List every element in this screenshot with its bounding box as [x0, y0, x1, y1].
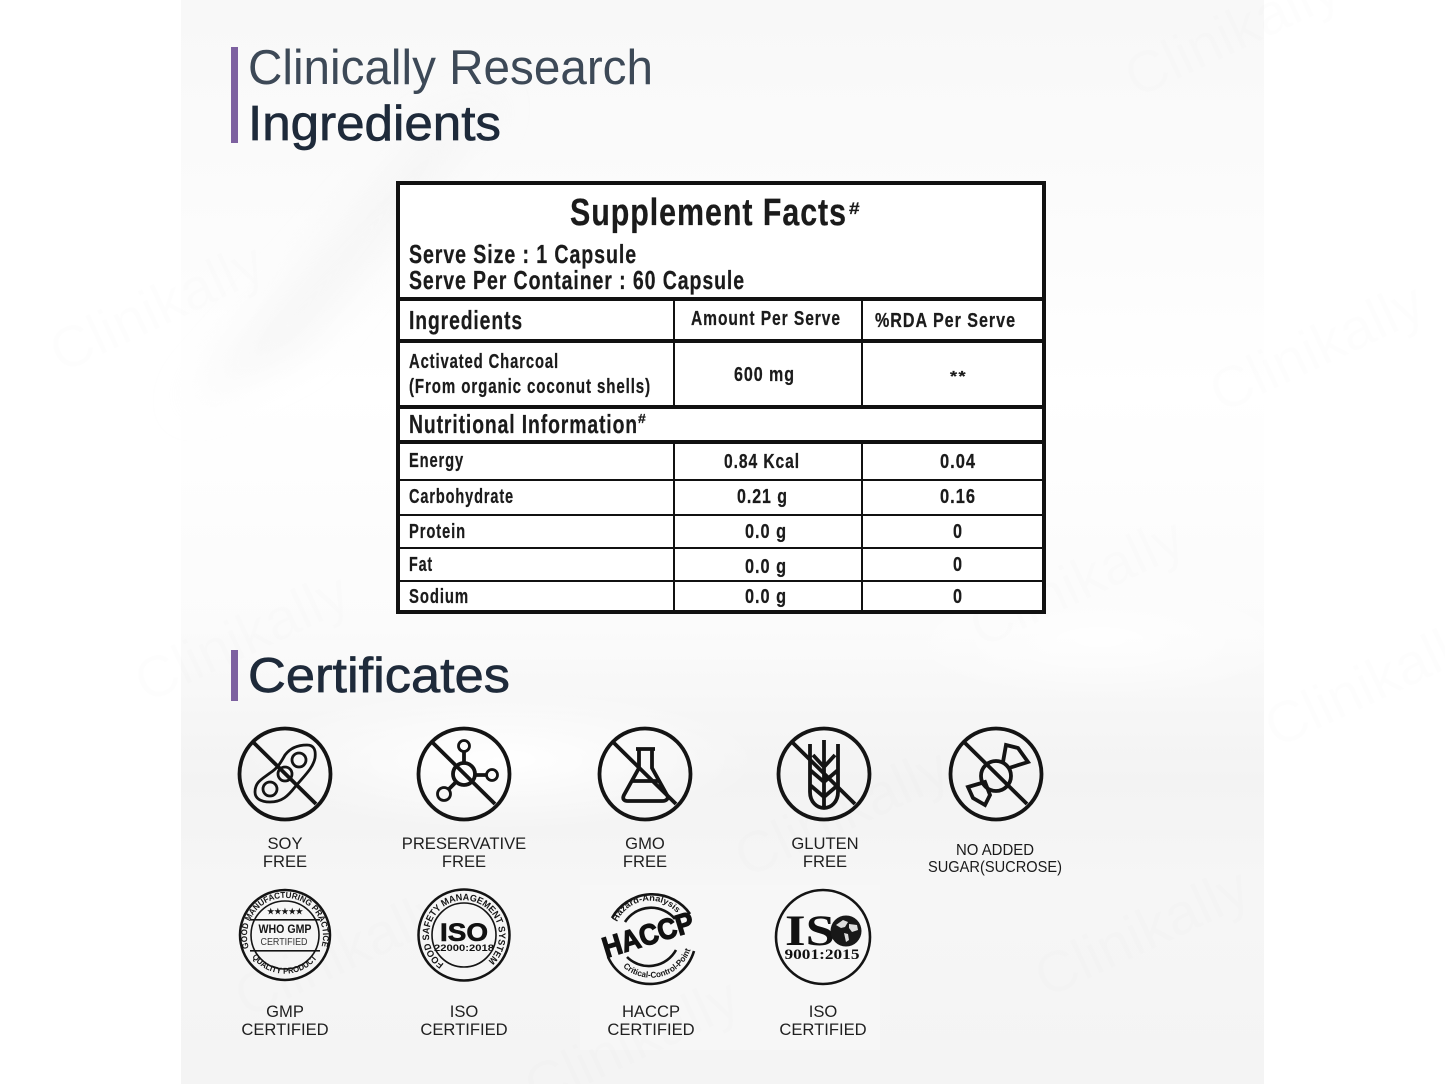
label: preservative free: FREE	[442, 852, 486, 871]
badge: iso 9001: IS	[785, 908, 835, 955]
label: no added sugar	[928, 842, 1062, 876]
badge: haccp: HACCP	[599, 907, 698, 965]
watermarks: Clinikally	[1199, 270, 1434, 425]
label: iso certified: CERTIFIED	[779, 1020, 867, 1039]
supplement facts table: Supplement Facts	[570, 192, 847, 234]
label: iso certified: CERTIFIED	[420, 1020, 508, 1039]
watermarks: Clinikally	[224, 875, 459, 1030]
badge: who gmp: WHO GMP	[258, 922, 312, 936]
badge: iso 9001: 9001:2015	[784, 947, 860, 963]
watermarks: Clinikally	[124, 560, 359, 715]
icon: gluten free	[778, 728, 870, 820]
supplement facts table: %RDA Per Serve	[875, 310, 1016, 332]
label: preservative free: PRESERVATIVE	[402, 834, 526, 853]
supplement facts table: Protein	[409, 521, 466, 543]
label: gmp certified: GMP	[266, 1002, 304, 1021]
supplement facts table: Nutritional Information	[409, 409, 638, 439]
label: iso certified	[420, 1002, 508, 1039]
badge: iso 9001	[776, 890, 870, 984]
badge: haccp	[599, 893, 698, 986]
supplement facts table: Ingredients	[409, 305, 523, 335]
badge: haccp: Hazard-Analysis	[612, 896, 680, 922]
supplement facts table: 0.0 g	[745, 556, 787, 578]
label: gmo free: GMO	[625, 834, 665, 853]
supplement facts table: 0.84 Kcal	[724, 451, 800, 473]
label: haccp certified: HACCP	[622, 1002, 680, 1021]
label: iso certified	[779, 1002, 867, 1039]
watermarks: Clinikally	[724, 735, 959, 890]
supplement facts table	[398, 183, 1044, 612]
label: gluten free	[791, 834, 859, 871]
heading: clinically research ingredients	[231, 41, 653, 151]
heading: clinically research ingredients: Ingredients	[248, 97, 501, 151]
label: haccp certified	[607, 1002, 695, 1039]
label: iso certified: ISO	[809, 1002, 837, 1021]
label: soy free: SOY	[267, 834, 303, 853]
label: iso certified: ISO	[450, 1002, 478, 1021]
supplement facts table: (From organic coconut shells)	[409, 376, 651, 398]
watermarks: Clinikally	[1024, 855, 1259, 1010]
supplement facts table: Serve Per Container : 60 Capsule	[409, 265, 745, 295]
supplement facts table: **	[950, 368, 967, 385]
supplement facts table: Fat	[409, 554, 433, 576]
badge: iso 22000: FOOD SAFETY MANAGEMENT SYSTEM	[422, 894, 506, 969]
label: gmp certified: CERTIFIED	[241, 1020, 329, 1039]
icon: soy free	[240, 728, 330, 820]
supplement facts table: 0	[953, 554, 963, 576]
label: gmo free: FREE	[623, 852, 667, 871]
label: no added sugar: NO ADDED	[956, 842, 1034, 859]
supplement facts table: 0	[953, 586, 963, 608]
label: preservative free	[402, 834, 526, 871]
label: no added sugar: SUGAR(SUCROSE)	[928, 859, 1062, 876]
supplement facts table: 0	[953, 521, 963, 543]
supplement facts table: Carbohydrate	[409, 486, 514, 508]
badge: iso 22000: ISO	[440, 919, 488, 947]
supplement facts table: Activated Charcoal	[409, 351, 559, 373]
icon: gmo free	[600, 728, 690, 820]
watermarks: Clinikally	[39, 230, 274, 385]
supplement facts table: 0.16	[940, 486, 976, 508]
supplement facts table: Energy	[409, 450, 464, 472]
badge: who gmp	[238, 888, 332, 982]
supplement facts table: Serve Size : 1 Capsule	[409, 239, 637, 269]
label: gluten free: GLUTEN	[791, 834, 859, 853]
label: haccp certified: CERTIFIED	[607, 1020, 695, 1039]
badge: who gmp: GOOD MANUFACTURING PRACTICE	[241, 892, 329, 949]
supplement facts table: 0.21 g	[737, 486, 788, 508]
label: gmp certified	[241, 1002, 329, 1039]
heading: clinically research ingredients: Clinically Research	[248, 41, 653, 95]
icon: no added sugar	[950, 728, 1042, 820]
heading: certificates: Certificates	[248, 649, 510, 703]
supplement facts table: 0.0 g	[745, 521, 787, 543]
watermarks: Clinikally	[959, 505, 1194, 660]
supplement facts table: Amount Per Serve	[691, 308, 841, 330]
icon: preservative free	[418, 728, 510, 820]
badge: who gmp: QUALITY PRODUCT	[253, 954, 316, 974]
label: soy free: FREE	[263, 852, 307, 871]
supplement facts table: 0.04	[940, 451, 976, 473]
supplement facts table: Sodium	[409, 586, 469, 608]
supplement facts table: #	[638, 411, 647, 426]
supplement facts table: #	[849, 199, 861, 218]
supplement facts table: 600 mg	[734, 364, 795, 386]
supplement facts table: 0.0 g	[745, 586, 787, 608]
background panel	[181, 0, 1300, 1084]
label: soy free	[263, 834, 307, 871]
label: gluten free: FREE	[803, 852, 847, 871]
badge: iso 22000: 22000:2018	[434, 943, 494, 954]
label: gmo free	[623, 834, 667, 871]
badge: who gmp: CERTIFIED	[260, 936, 308, 948]
badge: haccp: Critical-Control-Point	[624, 948, 690, 978]
badge: who gmp: ★★★★★	[267, 907, 304, 916]
